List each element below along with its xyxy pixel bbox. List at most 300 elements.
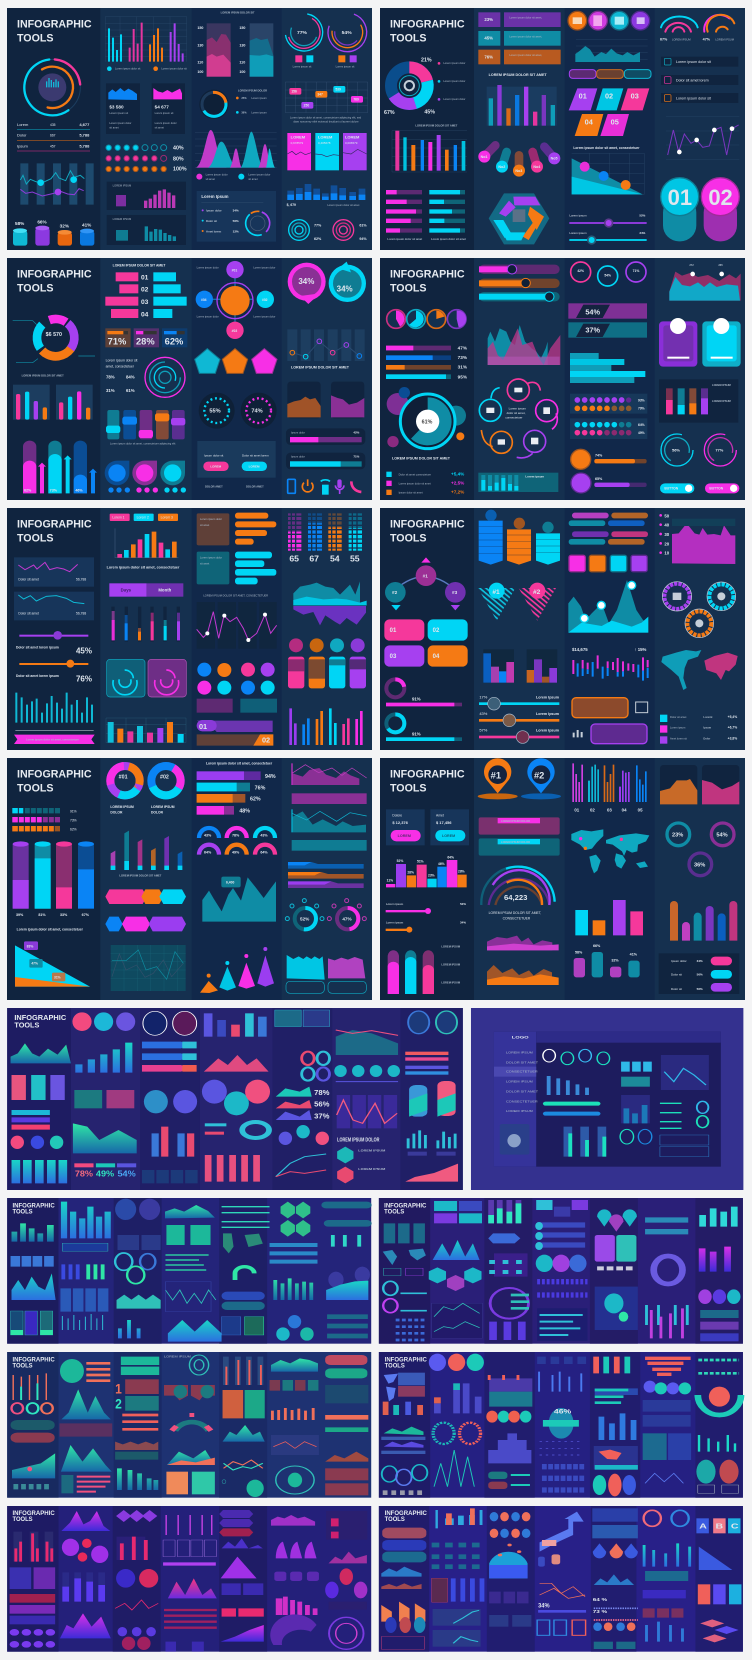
rounded columns	[388, 944, 461, 994]
col four: LOREM IPSUM	[164, 1355, 191, 1358]
tag grid: diam nonummy nibh euismod tincidunt ut laoreet dolore	[293, 120, 359, 124]
ring trio: 36%	[694, 862, 705, 868]
arc gauges: 47%	[703, 38, 711, 42]
slider group: Lorem Ipsum	[536, 729, 560, 733]
button card: DOLOR AMET	[205, 484, 223, 488]
percent tiles	[105, 328, 187, 347]
3d bar chart: 64%	[447, 855, 454, 859]
concentric rings: 77%	[297, 30, 308, 36]
multi bar cluster: 04	[622, 808, 627, 813]
percent bars: 62%	[250, 797, 261, 803]
horizontal step bars	[570, 353, 645, 383]
dotted line chart: LOREM IPSUM DOLOR SIT AMET	[291, 365, 350, 369]
wide center charts	[165, 1205, 222, 1342]
hub diagram: #02	[262, 298, 268, 302]
dot meters: 64%	[638, 423, 645, 427]
col four	[163, 1515, 217, 1652]
color keys	[293, 55, 357, 69]
horizontal progress bars: Lorem ipsum dolor sit amet	[431, 237, 466, 241]
text cards with bars: sit amet	[200, 562, 210, 566]
thermometer columns: 73%	[50, 488, 58, 492]
title	[12, 1356, 55, 1369]
progress cards: 71%	[353, 454, 360, 458]
title: INFOGRAPHIC	[384, 1202, 426, 1209]
button card: Dolor sit amet lorem	[242, 454, 269, 458]
percent bars: 76%	[255, 785, 266, 791]
value cards: $4 677	[155, 104, 169, 109]
hub diagram: Lorem ipsum dolor	[253, 266, 275, 270]
ring donuts: LOREM IPSUM	[110, 805, 134, 809]
dot matrices: 65	[289, 553, 299, 563]
donut legend: 25%	[241, 96, 247, 100]
col six	[270, 1515, 319, 1645]
percent rows: Lorem ipsum dolor sit amet,	[509, 34, 542, 38]
stats table	[17, 122, 90, 151]
stats table: Dolor	[17, 133, 27, 138]
value cards: Lorem ipsum sit	[109, 111, 128, 115]
stats table: 4,677	[79, 122, 90, 127]
key legend: +2,5%	[451, 481, 465, 486]
multi bar cluster: 01	[574, 808, 580, 813]
amount cards: Amet	[436, 813, 444, 817]
numbered capsules	[661, 178, 739, 241]
legend chips: Lorem 3	[161, 516, 173, 520]
hexagon diagram	[489, 193, 549, 244]
percent circles: 71%	[633, 269, 639, 273]
bar chart	[105, 17, 187, 71]
sliders: 52%	[460, 902, 466, 906]
cylinders: 41%	[82, 222, 92, 227]
list card with donut: 12%	[233, 229, 239, 233]
title	[12, 1202, 55, 1215]
sliders: Lorem ipsum	[569, 231, 587, 235]
title: TOOLS	[17, 32, 54, 44]
slider group	[479, 695, 560, 743]
stat text with rings: amet, consectetuer	[106, 364, 135, 368]
title: TOOLS	[14, 1021, 39, 1029]
col five	[222, 1357, 265, 1497]
col seven: A	[699, 1522, 707, 1530]
sliders: 34%	[639, 231, 646, 235]
stat text with rings	[106, 357, 185, 397]
legend values: Lorem ipsum	[670, 726, 686, 730]
lorem cards: 0,405678	[318, 141, 331, 145]
dot matrices: 54	[330, 553, 340, 563]
thermometer columns: 46%	[75, 488, 83, 492]
col six	[643, 1510, 691, 1642]
progress cards: Ipsum dolor	[291, 430, 305, 434]
ring trio	[667, 823, 734, 876]
title	[390, 18, 465, 44]
money donut: $6 570	[46, 332, 62, 338]
amount cards: $ 17,456	[436, 820, 452, 825]
percent rows: Lorem ipsum dolor sit amet,	[509, 16, 542, 20]
magenta area chart: 40	[664, 523, 670, 528]
col three	[486, 1375, 532, 1489]
stats table: 667	[50, 134, 56, 138]
panel: row 7 left teal dashboard	[7, 1352, 371, 1498]
slider toggles	[479, 265, 560, 301]
value cards: $3 580	[109, 104, 124, 109]
world maps	[661, 650, 738, 690]
stacked area charts: 150	[197, 26, 203, 30]
arc gauge	[481, 867, 555, 920]
tag banners: 37%	[585, 325, 600, 334]
slider columns: Lorem ipsum dolor sit amet, consectetuer adipiscing elit	[110, 442, 176, 446]
area cards	[660, 765, 739, 804]
legend values: Ipsum	[703, 726, 712, 730]
paired bars: LOREM IPSUM DOLOR SIT AMET	[22, 374, 64, 378]
col three: 2	[115, 1395, 122, 1412]
title: TOOLS	[17, 782, 54, 794]
half gauges: 43%	[260, 834, 268, 838]
stacked columns card: LOREM IPSUM	[712, 399, 732, 403]
left column	[383, 1223, 427, 1340]
magenta area chart	[661, 513, 735, 564]
key legend: +5,4%	[451, 472, 465, 477]
hub diagram: Lorem ipsum dolor	[197, 266, 219, 270]
dropdown list: Dolor sit amet lorem	[676, 78, 709, 82]
button card: LOREM	[249, 464, 260, 468]
wave area charts	[487, 936, 559, 985]
money donut	[13, 311, 95, 364]
ring donuts: DOLOR	[110, 810, 123, 814]
sidebar: LOREM IPSUM	[506, 1080, 533, 1083]
stacked area charts: 130	[197, 43, 203, 47]
sliders: Lorem ipsum	[569, 214, 587, 218]
sparkline cards: 56,788	[76, 612, 86, 616]
stacked area charts: 100	[197, 70, 203, 74]
title: INFOGRAPHIC	[385, 1356, 427, 1363]
percent bars: Lorem ipsum dolor sit amet, consectetuer	[206, 762, 273, 766]
text banners: LOREM IPSUM DOLOR	[501, 819, 530, 823]
small rings: 94%	[359, 237, 367, 241]
title: INFOGRAPHIC	[390, 768, 465, 780]
button list: 56%	[697, 987, 703, 991]
lorem cards: LOREM	[291, 135, 306, 140]
rings and bars	[543, 1049, 610, 1157]
dot meters	[570, 394, 647, 439]
dropdown list	[661, 57, 738, 103]
arc gauge: 64,223	[504, 893, 527, 902]
percent rows: 23%	[484, 17, 493, 22]
world map	[571, 829, 649, 873]
donut progress rows: 91%	[412, 697, 421, 702]
sliders	[569, 214, 647, 245]
icon bar cards: LOREM IPSUM	[113, 184, 131, 188]
charts column six	[334, 1030, 400, 1183]
small rings: 61%	[359, 224, 367, 228]
peak area chart: sit amet	[206, 177, 215, 181]
percent tiles: 71%	[108, 337, 127, 347]
percent rows: Lorem ipsum dolor sit amet,	[509, 53, 542, 57]
title	[390, 268, 465, 294]
small rings: 62%	[314, 237, 322, 241]
button list: 56%	[697, 973, 703, 977]
sidebar: DOLOR SIT AMET	[506, 1090, 538, 1093]
ribbon banner	[14, 735, 95, 744]
legend values: +6,7%	[728, 726, 737, 730]
col three	[115, 1357, 159, 1490]
gauge dots	[285, 899, 366, 929]
magenta area chart: 30	[664, 532, 670, 537]
callout area	[202, 877, 276, 922]
numbered parallelograms: 01	[579, 92, 587, 101]
cylinders: 58%	[15, 221, 25, 226]
donut legend: LOREM IPSUM DOLOR	[238, 88, 267, 92]
pentagon icons	[195, 349, 277, 373]
donut legend: Lorem ipsum	[251, 96, 267, 100]
segmented donut: 21%	[421, 57, 432, 63]
pin badges	[105, 461, 186, 493]
line grid chart	[111, 945, 186, 991]
callout area: 6,400	[226, 880, 234, 884]
pin cylinders	[288, 638, 366, 688]
stacked area: 265	[718, 263, 723, 267]
percent circles: 42%	[577, 269, 584, 273]
donut legend: Lorem ipsum	[251, 110, 267, 114]
panel: row 2 left dashboard	[7, 258, 372, 500]
toggle tabs: Days	[121, 588, 132, 593]
No. fans: No1	[481, 155, 488, 159]
stat text with rings: 84%	[126, 374, 135, 379]
striped triangles: #1	[492, 589, 500, 596]
stat text with rings: 31%	[106, 388, 115, 393]
col five: 64 %	[593, 1598, 607, 1603]
title	[14, 1014, 67, 1029]
color keys: Lorem ipsum sit	[336, 65, 355, 69]
button card	[197, 441, 276, 488]
location pins: #1	[491, 770, 501, 780]
3d bar chart: 28%	[407, 870, 414, 874]
thin 3d bars	[111, 831, 182, 878]
No. fans: No3	[515, 169, 522, 173]
square meters: 73%	[70, 818, 77, 822]
peak area chart	[195, 130, 277, 181]
node tree: #1	[423, 573, 428, 578]
title	[390, 768, 465, 794]
col two	[429, 1201, 482, 1338]
col two	[59, 1359, 112, 1493]
title	[390, 518, 465, 544]
3d bar chart: 23%	[428, 874, 435, 878]
half gauges: 49%	[232, 850, 240, 854]
slider group: 43%	[479, 711, 488, 716]
col four	[537, 1357, 586, 1490]
col three	[115, 1510, 158, 1650]
overlapping area chart	[488, 325, 560, 365]
col five	[595, 1209, 638, 1330]
cylinders: 66%	[37, 219, 48, 224]
color keys: Lorem ipsum sit	[293, 65, 312, 69]
button list: Ipsum dolor	[671, 959, 687, 963]
peak area chart: Lorem ipsum dolor	[206, 172, 228, 176]
3d bar chart: 11%	[387, 878, 393, 882]
legend values: +5,4%	[728, 715, 737, 719]
sliders: 76%	[76, 675, 92, 684]
dual bar panels	[483, 649, 557, 683]
lorem cards: LOREM	[345, 135, 360, 140]
donut progress rows	[386, 679, 462, 741]
large donut bubbles: 61%	[422, 419, 433, 425]
dot matrices	[287, 512, 363, 563]
charts column two: 49%	[96, 1169, 115, 1179]
level bars	[15, 693, 94, 731]
tag grid: 769	[353, 98, 359, 102]
legend chips: Lorem 2	[137, 516, 149, 520]
sparkline cards: 56,788	[76, 578, 86, 582]
title	[17, 768, 92, 794]
striped bars	[487, 73, 557, 126]
numbered parallelograms: 04	[585, 117, 594, 126]
list card with donut: 34%	[233, 209, 239, 213]
rounded column chart	[670, 901, 737, 941]
hub diagram: #01	[232, 268, 237, 272]
segmented donut: 45%	[424, 109, 435, 115]
col three: 1	[115, 1380, 122, 1397]
note boxes	[572, 698, 648, 744]
donut legend	[438, 61, 465, 101]
teal area chart	[575, 39, 648, 62]
No. fans: No5	[551, 157, 558, 161]
candlestick stats: $14,675	[572, 647, 588, 652]
bar callouts	[575, 900, 643, 935]
peak area chart: Lorem ipsum dolor	[248, 172, 270, 176]
small cylinders: 66%	[593, 944, 601, 948]
dot meters: 49%	[638, 431, 645, 435]
magenta area chart: 50	[664, 513, 670, 518]
slider group: 57%	[479, 728, 488, 733]
amount cards: $ 12,376	[392, 820, 409, 825]
spiral tiles	[107, 659, 186, 697]
value cards: Lorem ipsum dolor	[109, 121, 131, 125]
donut progress rows: 91%	[412, 731, 421, 736]
percent tiles: 28%	[136, 337, 155, 347]
col three	[489, 1512, 531, 1627]
charts column five: 56%	[314, 1100, 329, 1108]
numbered parallelograms: 02	[605, 92, 613, 101]
right column charts	[222, 1207, 270, 1335]
sliders: Dolor sit amet lorem ipsum	[16, 646, 59, 650]
icon circles	[568, 11, 650, 30]
arc gauges	[660, 15, 734, 42]
col seven	[325, 1355, 368, 1495]
title	[12, 1509, 55, 1523]
slider group: 17%	[479, 695, 488, 700]
title: TOOLS	[12, 1362, 33, 1369]
paired columns	[289, 708, 363, 745]
dot meters: 93%	[638, 398, 645, 402]
dot matrices: 55	[350, 553, 360, 563]
multi bar cluster	[572, 763, 647, 813]
list card with donut: Lorem Ipsum	[201, 194, 229, 199]
arc gauge: LOREM IPSUM DOLOR SIT AMET,	[489, 911, 541, 915]
small cylinders: 41%	[630, 953, 638, 957]
button list: Dolor sit	[671, 987, 682, 991]
striped triangles	[478, 583, 556, 621]
charts column six: LOREM IPSUM	[358, 1149, 386, 1152]
legend values: Loremt	[703, 715, 712, 719]
bottom level card	[478, 473, 558, 492]
left col	[10, 1532, 55, 1644]
charts column six: LOREM IPSUM	[358, 1168, 386, 1171]
percent bars: 47%	[458, 345, 468, 350]
title: TOOLS	[384, 1208, 405, 1215]
col six	[643, 1358, 691, 1483]
No. fans: No2	[498, 165, 505, 169]
band line chart: LOREM IPSUM DOLOR SIT AMET, CONSECTETUER	[203, 593, 268, 597]
stacked area charts: 110	[239, 61, 245, 65]
No. fans: No4	[533, 165, 541, 169]
progress dots: 80%	[173, 156, 184, 162]
arc gauges: LOREM IPSUM	[672, 38, 691, 42]
tube chart: 39%	[16, 913, 24, 917]
charts column two: 54%	[118, 1169, 136, 1179]
dotted rings	[199, 393, 277, 429]
sliders: Lorem ipsum	[386, 902, 404, 906]
title: INFOGRAPHIC	[17, 18, 92, 30]
key legend: Dolor sit amet consectetuer	[399, 472, 431, 476]
col four: 46%	[554, 1408, 572, 1415]
charts column five	[275, 1010, 329, 1177]
col seven	[325, 1511, 367, 1649]
donut legend	[199, 88, 267, 119]
dual area boxes	[286, 955, 366, 993]
icon bar cards: LOREM IPSUM	[113, 217, 131, 221]
arc gauges: LOREM IPSUM	[715, 38, 734, 42]
title: TOOLS	[390, 282, 427, 294]
col seven	[696, 1518, 741, 1642]
stacked area charts: 130	[239, 43, 245, 47]
percent rows: 45%	[484, 36, 493, 41]
pill tag rows	[569, 513, 648, 545]
slope callouts: Lorem ipsum dolor sit amet, consectetuer	[17, 928, 84, 932]
numbered rounded tiles: 01	[390, 628, 397, 634]
percent bars	[386, 345, 468, 379]
slider group: Lorem Ipsum	[536, 696, 560, 700]
title: INFOGRAPHIC	[17, 518, 92, 530]
spiral rings with buttons: BUTTON	[664, 487, 679, 491]
tag grid	[285, 82, 368, 124]
bar chart: Lorem ipsum dolor sit	[115, 67, 141, 71]
charts column four	[202, 1013, 270, 1182]
legend values: Dolor	[703, 737, 710, 741]
charts column three	[142, 1011, 198, 1183]
sparkline cards: Dolor sit amet	[18, 578, 39, 582]
ring donuts: LOREM IPSUM	[151, 805, 175, 809]
ring donuts: #02	[160, 775, 169, 781]
sliders: 52%	[639, 214, 646, 218]
col five: 73 %	[593, 1610, 607, 1615]
key legend: Lorem ipsum dolor sit amet	[399, 481, 431, 485]
title: TOOLS	[17, 282, 54, 294]
mirrored area chart	[293, 581, 367, 625]
process cycle: Lorem ipsum	[509, 406, 526, 410]
spiral rings with buttons: 77%	[715, 447, 724, 452]
title: INFOGRAPHIC	[17, 768, 92, 780]
charts column two: 78%	[75, 1169, 93, 1179]
vertical meters	[111, 607, 180, 642]
left column	[11, 1373, 55, 1487]
col four	[537, 1512, 586, 1635]
left column charts	[11, 1223, 56, 1335]
legend values	[660, 715, 737, 744]
3d bar chart: 28%	[458, 869, 465, 873]
half gauges: 64%	[260, 850, 268, 854]
blue bar row: $, 679	[287, 203, 296, 207]
numbered parallelograms: 03	[631, 92, 639, 101]
small rings	[289, 220, 367, 241]
